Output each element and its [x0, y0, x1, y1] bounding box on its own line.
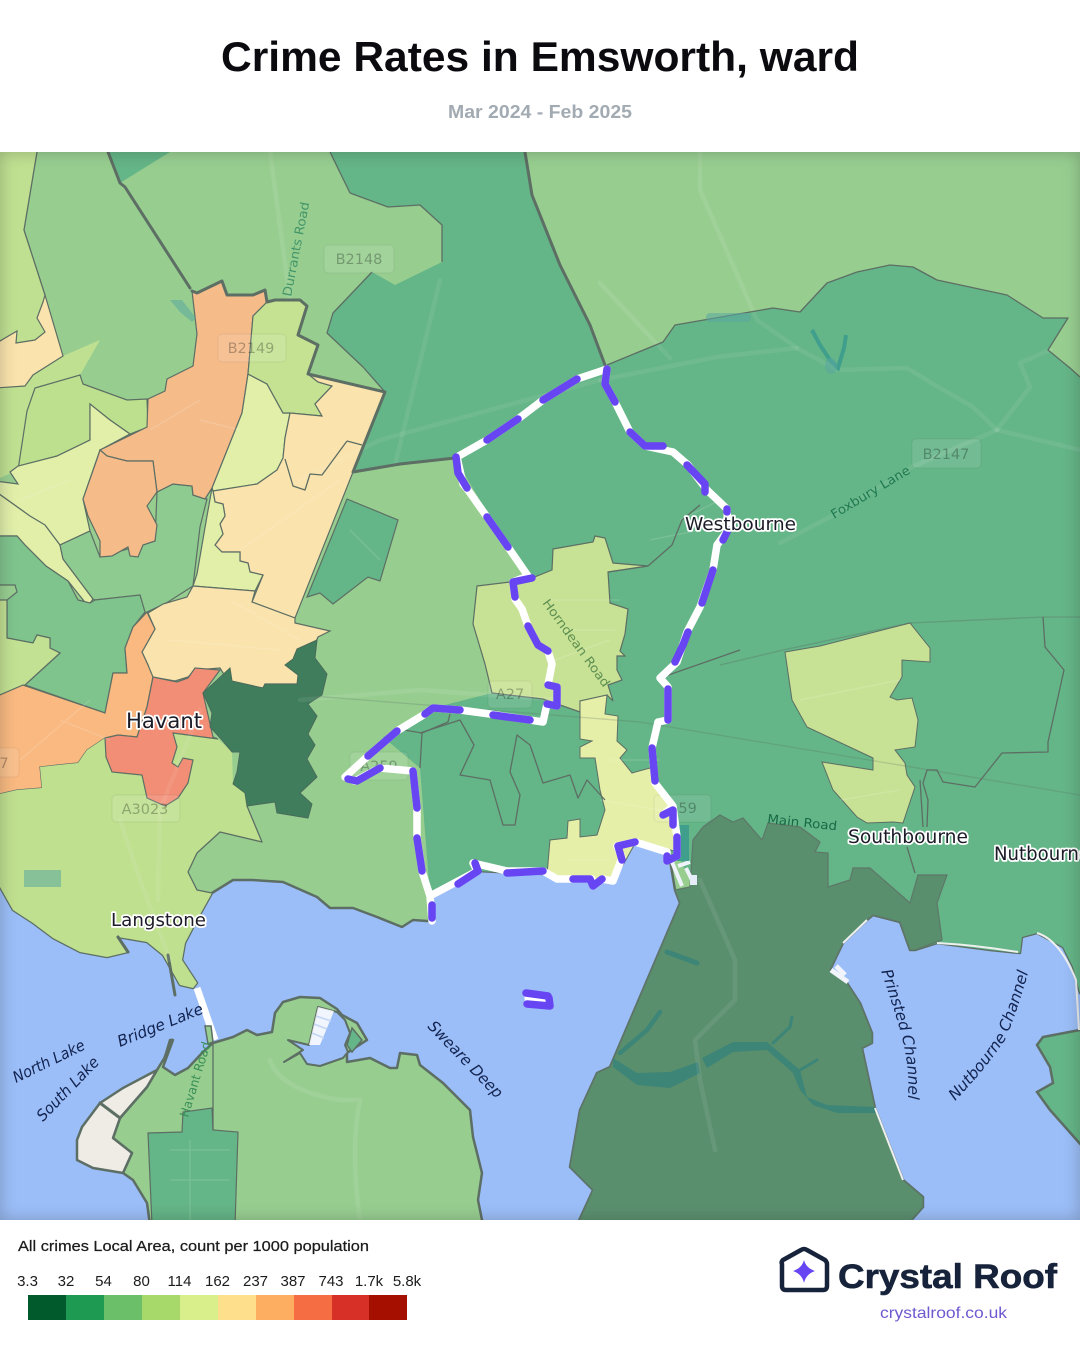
icon: house with star [779, 1246, 830, 1292]
road shields: A259 [360, 759, 398, 775]
creeks on the peninsula [613, 952, 877, 1113]
legend tick labels: 114 [168, 1273, 191, 1290]
inlet strokes [118, 937, 175, 1057]
zone: yellow-green north [248, 300, 332, 416]
place label: Southbourne: Southbourne [848, 827, 968, 848]
legend tick labels: 1.7k [355, 1273, 384, 1290]
road shields: B2148 [336, 252, 382, 268]
legend tick labels: 743 [318, 1273, 344, 1290]
legend [17, 1238, 422, 1320]
Hayling medium block [148, 1108, 238, 1225]
spit divider [100, 1103, 120, 1118]
legend tick labels: 32 [58, 1273, 74, 1290]
legend tick labels: 80 [133, 1273, 150, 1290]
sand spit [77, 1070, 157, 1173]
zone: Hayling dark peninsula [570, 815, 947, 1225]
ward boundary: purple dashes [348, 369, 728, 918]
harbour teal [677, 825, 689, 861]
zone: north-east and ward medium green [383, 265, 1080, 1000]
zone: pale yellow Emsworth [547, 695, 677, 883]
ward boundary: white base line [345, 369, 728, 921]
road label: Durrants Road: Durrants Road [279, 200, 312, 298]
zone: red centre [105, 668, 220, 806]
zone: west yellow-green block [18, 375, 148, 470]
islet [347, 1028, 362, 1052]
zone: yellow-green Southbourne [785, 623, 930, 823]
zone: yellow-green west of ward [473, 536, 648, 712]
divider line [212, 1043, 214, 1130]
marina pontoons [309, 1007, 334, 1045]
marina bay [284, 1007, 350, 1066]
legend tick labels: 387 [280, 1273, 306, 1290]
subtitle: date range: Mar 2024 - Feb 2025 [448, 102, 632, 122]
website link text: crystalroof.co.uk [880, 1305, 1008, 1322]
logo: Crystal Roof [779, 1246, 1058, 1322]
water label: Sweare Deep: Sweare Deep [424, 1017, 507, 1102]
place label: Langstone: Langstone [111, 910, 206, 931]
legend tick labels: 54 [95, 1273, 112, 1290]
zone: pale north centre [212, 374, 290, 491]
zone: yellow-green south-west [0, 733, 262, 988]
legend colour scale [28, 1295, 407, 1320]
zone: west medium-light green [0, 536, 145, 713]
map edge shading [0, 152, 1080, 1220]
zone: orange south-west lobe [83, 450, 157, 557]
Hayling Island north [113, 997, 483, 1225]
legend tick labels: 162 [205, 1273, 230, 1290]
zone: north medium green band [327, 152, 607, 472]
zone: peach south [142, 586, 330, 688]
water label: Prinsted Channel: Prinsted Channel [881, 970, 920, 1100]
zone: far west peach [0, 295, 63, 388]
zone: far west yellow-green [0, 152, 100, 480]
road label: Horndean Road: Horndean Road [540, 596, 613, 690]
legend title: All crimes Local Area, count per 1000 population [18, 1238, 369, 1255]
water label: Bridge Lake: Bridge Lake [115, 1000, 206, 1051]
neighbourhood street texture [20, 400, 900, 1220]
inner pale strip line [0, 491, 60, 545]
zone: darkest green Havant [203, 640, 327, 818]
title: Crime Rates in Emsworth, ward [221, 33, 859, 80]
zone: pale strip [193, 488, 263, 591]
zone: orange north [100, 281, 267, 499]
zone: peach north-east [213, 374, 385, 618]
water label: South Lake: South Lake [33, 1053, 103, 1125]
map panel [0, 152, 1080, 1220]
zone: west light green patch [0, 600, 60, 697]
water label: North Lake: North Lake [10, 1036, 88, 1087]
zone: centre lobe green [60, 484, 207, 613]
zone outlines [24, 152, 1064, 873]
road label: Foxbury Lane: Foxbury Lane [828, 462, 913, 522]
road shields [0, 245, 981, 822]
road shields: 259 [669, 801, 697, 817]
Prinsted pier [831, 966, 848, 982]
water label: Nutbourne Channel: Nutbourne Channel [948, 969, 1028, 1101]
ponds [24, 300, 846, 887]
road label: Main Road: Main Road [767, 811, 838, 833]
thick zone boundaries [108, 152, 1080, 472]
sea [0, 152, 1080, 1220]
legend tick labels: 3.3 [17, 1273, 38, 1290]
road label: Havant Road: Havant Road [177, 1040, 214, 1119]
place label: Havant: Havant [126, 709, 202, 733]
zone: west pale yellow strip [0, 404, 130, 606]
wordmark: Crystal Roof [838, 1258, 1058, 1296]
legend tick labels [17, 1273, 422, 1290]
bridge [197, 988, 215, 1040]
roads [120, 150, 1080, 1220]
bridge islet [205, 1026, 213, 1044]
lobe outline [188, 806, 262, 893]
white beach edge [843, 920, 1079, 1180]
road shields: A3023 [122, 802, 168, 818]
ward detached islet [524, 991, 551, 1007]
road shields: B2149 [228, 341, 274, 357]
zone: medium patch east of peach [307, 499, 398, 604]
zone: top-left small medium triangle [108, 152, 170, 183]
harbour white piers [672, 862, 697, 886]
bottom-right land [1037, 1028, 1080, 1155]
zone: orange town [0, 612, 155, 795]
legend tick labels: 237 [243, 1273, 268, 1290]
place label: Westbourne: Westbourne [685, 514, 796, 535]
road shields: B2147 [923, 447, 969, 463]
road shields: A27 [496, 687, 524, 703]
legend tick labels: 5.8k [393, 1273, 422, 1290]
